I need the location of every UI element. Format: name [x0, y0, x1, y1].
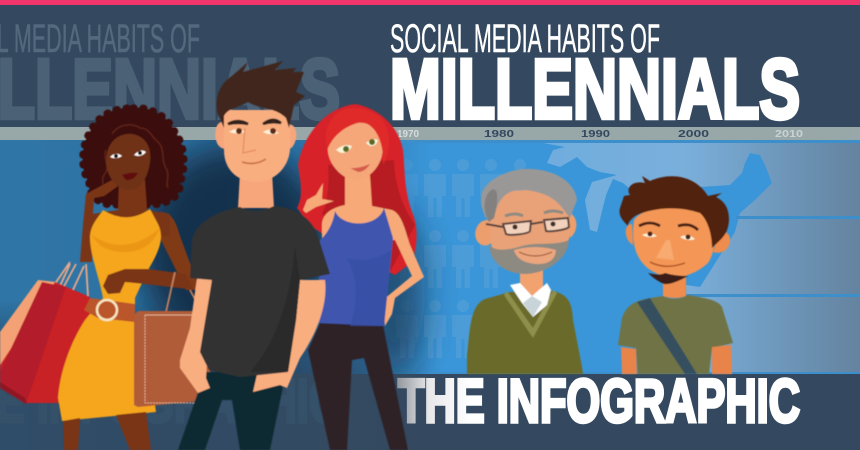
- face details: [639, 223, 698, 284]
- ghost people icons: [396, 159, 531, 358]
- figure: young man: [618, 176, 733, 374]
- fore arm: [103, 269, 196, 294]
- map water and coastline: [543, 143, 860, 372]
- hair: [217, 61, 305, 128]
- neck: [663, 270, 686, 298]
- shirt: [618, 295, 733, 374]
- figure: woman in blue top: [297, 104, 424, 450]
- timeline strip: 1990: [581, 128, 610, 140]
- shopping bags red: [0, 262, 90, 404]
- arm right: [160, 212, 197, 290]
- arm left raised: [80, 180, 118, 262]
- face: [328, 123, 383, 180]
- map latitude lines: [400, 140, 860, 374]
- timeline strip: 1980: [484, 128, 514, 140]
- strap: [637, 298, 697, 374]
- figures with soft edges: [0, 61, 733, 450]
- timeline strip: 2000: [678, 128, 709, 140]
- figure: man in black t-shirt: [178, 61, 330, 450]
- face: [633, 205, 714, 277]
- eyes and lips: [110, 151, 146, 180]
- shirt collar: [510, 283, 551, 317]
- ears: [215, 122, 296, 149]
- smile patch: [514, 247, 556, 264]
- shoulders neck: [92, 180, 170, 236]
- pink top bar: [0, 0, 860, 5]
- ghost title: [0, 17, 340, 435]
- right arm: [253, 280, 325, 392]
- brows: [505, 211, 563, 216]
- figure: older man: [467, 169, 583, 374]
- eyes lips: [336, 139, 378, 172]
- neck: [520, 270, 543, 302]
- brown shopping bag: [134, 272, 210, 407]
- hair: [481, 169, 577, 222]
- timeline strip: [0, 127, 860, 140]
- raised hand: [303, 183, 334, 213]
- neck: [238, 172, 274, 208]
- pants: [308, 323, 408, 450]
- legs: [63, 412, 151, 450]
- dress shade: [92, 228, 160, 252]
- timeline strip: 1970: [397, 128, 419, 140]
- v collar: [504, 290, 557, 338]
- ears: [626, 224, 730, 253]
- shadow behind trio: [140, 145, 425, 370]
- blue panel right: [430, 139, 860, 374]
- tank top: [318, 208, 393, 326]
- blue panel left: [0, 139, 430, 374]
- glasses: [486, 218, 569, 235]
- t-shirt: [190, 206, 330, 377]
- hair under shade: [322, 160, 415, 272]
- left arm: [180, 278, 212, 393]
- arms: [621, 345, 732, 374]
- timeline strip: 2010: [775, 128, 803, 140]
- face: [106, 134, 150, 190]
- dress: [58, 209, 161, 421]
- right arm: [383, 210, 424, 326]
- ears: [475, 213, 576, 246]
- hair: [619, 176, 729, 248]
- bottom band left: [0, 374, 430, 450]
- eyebrows eyes mouth: [228, 120, 281, 163]
- beard: [489, 240, 569, 274]
- hair front: [326, 108, 389, 165]
- panel left fade: [0, 308, 432, 374]
- jeans: [178, 372, 286, 450]
- face: [224, 110, 290, 182]
- face: [490, 190, 570, 270]
- hair back red: [297, 104, 416, 275]
- hair back curly: [83, 108, 184, 205]
- belt: [84, 298, 135, 322]
- figure: woman in yellow dress: [0, 108, 197, 450]
- neck and shoulders: [322, 175, 398, 240]
- sweater: [467, 290, 583, 374]
